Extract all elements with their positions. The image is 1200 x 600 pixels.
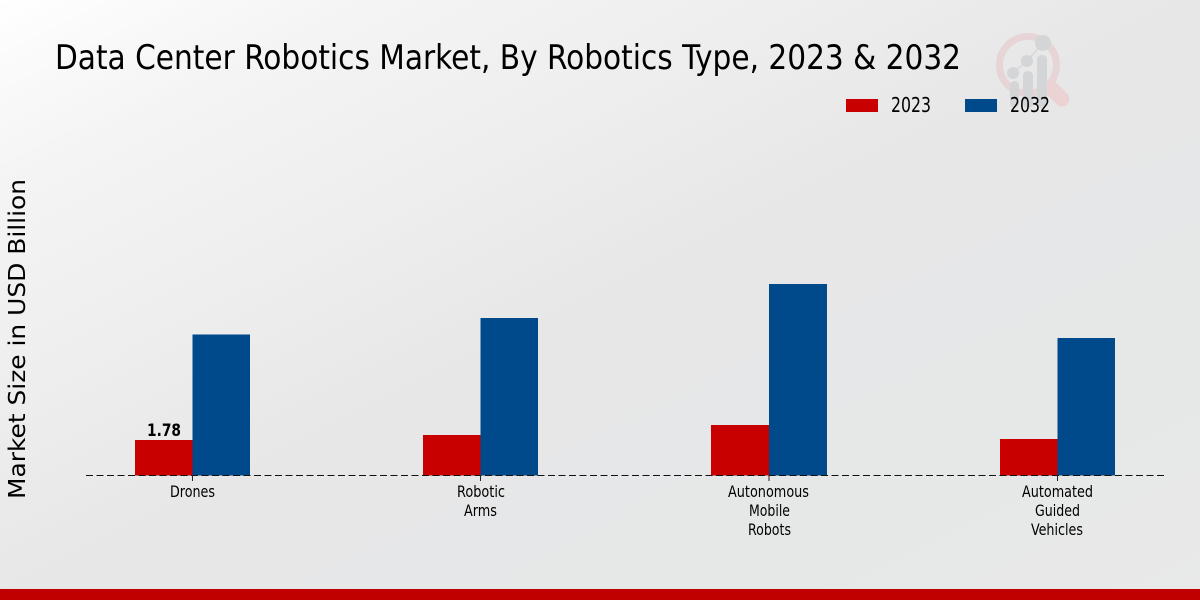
category label: Automated Guided Vehicles: Vehicles xyxy=(1031,520,1083,539)
legend label: 2032: 2032 xyxy=(1010,93,1050,117)
category label: Robotic Arms: Arms xyxy=(464,501,497,520)
legend label: 2023: 2023 xyxy=(891,93,931,117)
category label: Autonomous Mobile Robots: Autonomous xyxy=(728,482,809,501)
category label: Autonomous Mobile Robots xyxy=(728,482,809,539)
title: Data Center Robotics Market, By Robotics Type, 2023 & 2032 xyxy=(55,38,961,78)
category label: Automated Guided Vehicles: Automated xyxy=(1022,482,1093,501)
bars: Robotic Arms xyxy=(423,318,538,476)
legend swatch: 2032 xyxy=(965,99,997,112)
category label: Automated Guided Vehicles xyxy=(1022,482,1093,539)
footer bar xyxy=(0,589,1200,600)
category label: Robotic Arms xyxy=(457,482,505,520)
bar chart xyxy=(86,284,1164,481)
bars: Drones xyxy=(135,334,250,476)
category label: Autonomous Mobile Robots: Robots xyxy=(748,520,791,539)
bars: Automated Guided Vehicles xyxy=(1000,338,1115,476)
legend swatch: 2023 xyxy=(846,99,878,112)
logo watermark xyxy=(1000,35,1062,108)
category label: Drones: Drones xyxy=(170,482,215,501)
y axis label: Market Size in USD Billion xyxy=(5,179,31,499)
legend xyxy=(846,93,1050,117)
category label: Robotic Arms: Robotic xyxy=(457,482,505,501)
category label: Autonomous Mobile Robots: Mobile xyxy=(749,501,790,520)
bars: Autonomous Mobile Robots xyxy=(711,284,827,476)
category label: Automated Guided Vehicles: Guided xyxy=(1035,501,1080,520)
value label: 1.78: 1.78 xyxy=(147,421,181,440)
